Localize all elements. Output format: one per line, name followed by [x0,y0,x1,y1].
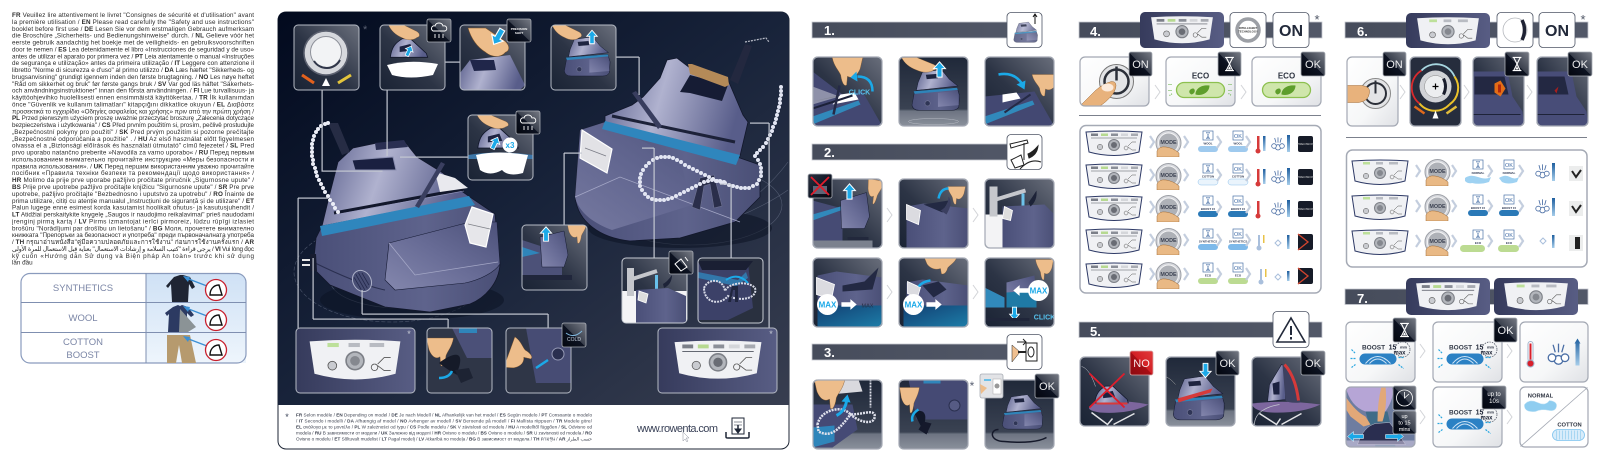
step 7.1 panel: boost warming: 15 [1389,344,1396,352]
badge: OK: OK [1305,358,1322,370]
badge: OK [1301,351,1325,375]
badge: OK: OK [1572,59,1589,71]
text block: multilingual safety notice: PL Przed pierwszym użyciem proszę uważnie przeczytać broszurę „Zalecenia dotyczące [12,115,254,122]
badge: up to 10s: 10s [1489,399,1499,405]
icon: ON button [1539,12,1575,48]
badge: ON [1383,52,1406,76]
step 7.3 panel: temperature and steam up [1520,322,1588,382]
panel: control panel variant B [658,328,777,393]
text block: multilingual safety notice: lần đầu [12,258,33,266]
text block: multilingual safety notice: eerste gebruik aandachtig het boekje met de veiligheids- en gebruiksvoorschriften [12,40,254,46]
section 4 header [1079,22,1322,39]
chevron [1507,410,1512,424]
text block: multilingual safety notice: Palun lugege enne esimest korda kasutamist hoolikalt ohutus- ja kasutusjuhendit / [12,205,254,212]
section 3 header [812,344,1030,360]
step 7.2 panel: boost ready: max [1480,350,1493,356]
table: steam modes (model with five settings) [1080,126,1321,293]
step 2.5 panel: MAX [905,300,923,310]
asterisk: * [363,24,368,36]
step 4.2 panel: ECO blinking: ECO [1192,72,1209,80]
step 7.2 panel: boost ready: BOOST [1449,344,1472,352]
step 7.6 panel: normal or cotton: COTTON [1557,422,1582,428]
row: synthetics [1086,228,1313,255]
text block: multilingual safety notice: προσεκτικά το εγχειρίδιο «Οδηγίες ασφαλείας και χρήσης» πριν από την πρώτη χρήση / [12,107,254,115]
floor rings [294,162,788,322]
row: eco: MODE [1160,272,1177,278]
text block: multilingual safety notice: olvassa el a „Biztonsági előírások és használati útmutató" című fejezetet / SL Pred [12,143,254,150]
step 1.3 panel [984,56,1059,126]
row: eco [1086,262,1313,289]
row: normal [1352,160,1583,186]
badge: no iron on base [808,174,832,198]
row: eco [1352,230,1583,256]
row: cotton: COTTON [1232,174,1244,178]
badge: OK [1301,52,1325,76]
table: fabric settings: COTTON [63,337,103,348]
step 7.5 panel: boost indicator [1433,387,1502,447]
footnote: depending on model: Ovisno o modelu / ET Sõltuvalt mudelist / LT Pagal modelį / LV Atkarībā no modeļa / BG В зависимост от модела / TH ตามรุ่น / AR حسب الطراز [296,436,592,442]
row: boost [1352,194,1583,221]
panel: drain cap [504,328,571,393]
badge: clock [1393,386,1416,410]
badge: precision shot: PRECISION [511,27,527,31]
chevron [1241,85,1246,99]
row: eco: OK [1234,266,1242,272]
badge: steam [427,19,451,42]
chevron [1507,344,1512,358]
step 1.1 panel [812,56,882,126]
text block: multilingual safety notice: / TH กรุณาอ่านหนังสือ"คู่มือความปลอดภัยและการใช้งาน" ก่อนการใช้งานครั้งแรก / AR [12,237,254,246]
row: cotton: COTTON [1202,174,1214,178]
row: normal: MODE [1429,169,1446,175]
step 6.4 panel: light off [1536,56,1588,126]
badge: ON [1129,52,1152,76]
tile: control panel [1140,12,1224,48]
step 2.3 panel [984,178,1054,248]
step 7.6 panel: normal or cotton [1520,387,1588,447]
row: cotton: PRECISION [1297,175,1314,179]
badge: ON: ON [1386,59,1403,71]
connector lines [298,56,770,328]
section 4 header: 4. [1090,24,1101,39]
badge: OK: OK [1220,358,1236,370]
panel: tank removal [522,223,587,290]
icon: ON button: ON [1279,23,1303,40]
step 4.2 panel: ECO blinking [1166,57,1235,106]
icon: intelligent technology dial [1230,12,1266,48]
badge: OK [1035,374,1059,398]
step 6.3 panel: warning light [1472,56,1524,126]
row: wool: OK [1234,134,1242,140]
step 3.3 panel [984,380,1054,450]
step 2.4 panel: MAX [862,304,874,310]
text block: multilingual safety notice: įrenginį pirmą kartą / LV Pirms izmantojat ierīci pirmoreiz, lūdzu rūpīgi izlasiet [12,218,254,225]
step 2.6 panel: MAX [1030,286,1048,296]
panel: triple steam [468,115,533,180]
panel: precision shot [460,25,525,90]
panel: lift iron [551,25,616,90]
badge: OK: OK [1039,381,1056,393]
badge: up to 10s: up to [1487,392,1501,398]
step 5.3 panel: upright on heel [1252,356,1322,426]
divider [1079,114,1321,116]
illustration: steam station left view [302,123,500,312]
row: synthetics: OK [1234,232,1242,238]
panel: cord storage [698,258,763,323]
footnote: depending on model: / IT Secondo i modelli / DA Afhængig af model / NO Avhenger av modell / SV Beroende på modell / FI Mallista riippuen / TR Modele göre/ [296,418,593,424]
badge: triple steam [516,111,540,134]
badge: cold [562,323,586,347]
divider [1346,136,1587,138]
step 6.1 panel: press ON [1346,56,1398,126]
row: eco: OK [1505,233,1513,239]
panel: control panel variant B: * [769,329,773,339]
row: wool: PRECISION [1297,142,1314,146]
icon: cursor [683,432,689,442]
section 1 header [812,22,1030,38]
panel: triple steam: x3 [506,141,515,150]
badge: NO: NO [1133,358,1150,370]
row: boost: BOOST 15 [1231,207,1246,211]
badge: OK: OK [1498,325,1514,337]
step 4.1 panel: press ON [1080,56,1150,106]
text block: multilingual safety notice: BS Prije prve upotrebe pažljivo pročitajte knjižicu "Sigurnosne upute" / SR Pre prve [12,184,254,191]
icon: intelligent technology dial: TECHNOLOGY [1238,30,1258,34]
chevron [1420,344,1425,358]
text block: multilingual safety notice: och användningsinstruktioner" innan den första användningen. / FI Lue turvallisuus- ja [12,88,254,95]
footnote: depending on model: * [285,412,289,422]
row: boost: PRECISION [1297,207,1314,211]
step 7.5 panel: boost indicator: max [1480,416,1493,422]
text block: multilingual safety notice: LT Atidžiai perskaitykite knygelę „Saugos ir naudojimo reikalavimai" prieš naudodami [12,212,254,218]
icon: download document [726,418,749,438]
step 5.2 panel: on base [1166,356,1236,426]
text block: multilingual safety notice: правила использования». / UK Перед першим використанням уважно прочитайте [12,162,254,170]
step 5.1 panel: not flat on board [1080,356,1150,426]
badge: OK [1216,351,1239,375]
icon: ON button: ON [1545,23,1569,40]
step 7.2 panel: boost ready: 15 [1476,344,1483,352]
section 5 header [1079,322,1322,339]
text block: multilingual safety notice: kỹ cuốn «Hướng dẫn Sử dụng và Biện pháp An toàn» trước khi sử dụng [12,251,254,260]
row: boost: MODE [1429,204,1446,210]
text block: multilingual safety notice: „Bezpečnostní pokyny pro použití" / SK Pred prvým použitím si pozorne prečítajte [12,129,254,136]
row: wool [1086,130,1314,157]
badge: cold: COLD [567,337,581,343]
badge: NO [1130,351,1153,375]
tile: control panel five settings [1406,278,1490,315]
step 7.4 panel: ironing movement [1346,386,1416,448]
row: eco: MODE [1429,239,1446,245]
asterisk: * [1580,12,1586,27]
table: fabric settings: WOOL [68,313,98,324]
row: boost: BOOST 15 [1201,207,1216,211]
step 7.5 panel: boost indicator: BOOST [1449,410,1472,416]
icon: temperature dial [1497,12,1533,48]
panel: fill under tap [622,258,687,323]
badge: OK [1568,52,1592,76]
text block: multilingual safety notice: FR Veuillez lire attentivement le livret "Consignes de sécurité et d'utilisation" avant [12,12,254,19]
tile: control panel three settings [1494,278,1578,315]
section 5 header: 5. [1090,324,1101,339]
row: boost: OK [1234,199,1242,205]
footnote: depending on model: modela / RU В зависимости от модели / UK Залежно від моделі / HR Ovisno o modelu / BS Ovisno o modelu / SR U zavisnosti od modela / RO [296,430,592,436]
text block: multilingual safety notice: upotrebe, pažljivo pročitajte "Bezbednosno i uputstvo za upotrebu" / RO Înainte de [12,189,254,198]
step 7.1 panel: boost warming: min [1400,344,1408,350]
row: synthetics: MODE [1160,238,1177,244]
hose: left station [310,121,340,214]
row: boost [1086,196,1314,222]
footnote: depending on model [285,412,593,442]
chevron [1464,85,1469,99]
panel: temperature dial [294,25,359,90]
table: fabric settings [21,273,246,363]
row: cotton: MODE [1160,173,1177,179]
badge: precision shot [507,19,531,42]
asterisk: * [970,379,975,393]
chevron [1527,85,1532,99]
row: eco: ECO [1475,241,1482,245]
badge: up to 15 mins: to 15 [1398,420,1411,426]
row: eco: ECO [1235,274,1242,278]
step 7.1 panel: boost warming: max [1393,350,1406,356]
row: boost: MODE [1160,205,1177,211]
panel: control panel variant A [296,328,415,393]
text block: multilingual safety notice: door te nemen / ES Lea detenidamente el libro «Instrucciones de seguridad y de uso» [12,46,254,53]
step 7.1 panel: boost warming [1346,322,1415,382]
step 2.6 panel: CLICK [1034,314,1055,322]
chevrons row 2a [887,208,978,222]
step 6.2 panel: temperature dial [1410,56,1462,126]
section 7 header [1345,289,1588,306]
illustration: steam station right view [575,38,769,241]
text block: multilingual safety notice: käyttöohjevihko huolellisesti ennen ensimmäistä käyttökertaa. / TR İlk kullanımdan [12,93,254,102]
text block: multilingual safety notice: booklet before first use / DE Lesen Sie vor dem erstmaligen Gebrauch aufmerksam [12,26,254,33]
chevron [1420,410,1425,424]
row: eco: ECO [1506,241,1513,245]
step 7.5 panel: boost indicator: min [1487,410,1495,414]
text block: multilingual safety notice: посібник «Правила техніки безпеки та рекомендації щодо використання» / [12,169,254,177]
icon: intelligent technology dial: INTELLIGENT [1239,26,1257,30]
section 2 header: 2. [824,145,835,160]
hose: right station [638,85,783,202]
panel: control panel variant A: * [407,329,411,339]
row: boost: BOOST 15 [1471,206,1486,210]
text block: multilingual safety notice: la première utilisation / EN Please read carefully the "Safety and use instructions" [12,19,254,26]
badge: hourglass [1393,318,1416,342]
row: wool: WOOL [1204,142,1213,146]
step 7.1 panel: boost warming: BOOST [1362,344,1385,352]
step 7.5 panel: boost indicator: 15 [1476,410,1483,416]
text block: multilingual safety notice: يرجى قراءة "كتيب السلامة و إرشادات الاستعمال" بعناية قبل الاستعمال للمرة الأولى / VI Vui lòng đọc [12,245,254,253]
section 7 header: 7. [1357,291,1368,306]
table: fabric settings: BOOST [66,350,100,361]
panel: steam button [380,24,445,90]
section 6 header [1345,22,1588,39]
text block: multilingual safety notice [12,12,254,266]
website url: www.rowenta.com [636,423,718,435]
row: normal: NORMAL [1503,171,1516,175]
step 4.3 panel: ECO ready [1252,57,1321,106]
step 1.1 panel: CLICK [849,90,870,96]
row: synthetics: SYNTHETICS [1229,240,1247,244]
row: cotton: OK [1234,167,1242,173]
icon: ON button [1273,12,1309,48]
row: eco: ECO [1205,274,1212,278]
badge: up to 15 mins [1393,411,1416,434]
icon: plug in [1007,334,1042,370]
text block: multilingual safety notice: antes de utilizar el aparato por primera vez / PT Leia atentamente o manual «Instruções [12,53,254,60]
row: normal: NORMAL [1472,171,1485,175]
badge: up to 10s [1482,386,1506,409]
step 2.6 panel [984,258,1055,328]
step 7.2 panel: boost ready [1433,322,1502,382]
step 3.1 panel [812,380,882,450]
step 7.2 panel: boost ready: min [1487,344,1495,350]
footnote: depending on model: FR Selon modèle / EN Depending on model / DE Je nach Modell / NL Afhankelijk van het model / ES Según modelo / PT Consoante o modelo [296,412,592,418]
row: normal: OK [1505,163,1513,169]
step 2.5 panel [898,258,968,328]
badge: wall socket [980,374,1003,398]
row: boost: BOOST 15 [1502,206,1517,210]
tile: control panel [1406,13,1490,48]
text block: multilingual safety notice: prima utilizare, citiți cu atenție manualul „Instrucțiuni de siguranță și de utilizare" / ET [12,198,254,205]
step 2.4 panel [812,258,882,328]
section 3 header: 3. [824,345,835,360]
badge: ON: ON [1132,59,1149,71]
badge: precision shot: SHOT [515,31,523,35]
text block: multilingual safety notice: brošūru "Norādījumi par drošību un lietošanu" / BG Моля, прочетете внимателно [12,225,254,232]
badge: hourglass [1505,52,1529,76]
badge: up to 15 mins: up [1401,414,1408,420]
text block: multilingual safety notice: "Råd om sikkerhet og bruk" før første gangs bruk / SV Var god läs häftet "Säkerhets- [12,80,254,88]
table: fabric settings: SYNTHETICS [53,283,113,294]
step 1.2 panel [898,56,968,126]
badge: hourglass [1218,52,1241,76]
text block: multilingual safety notice: prvo uporabo natančno preberite »Navodila za varno uporabo« / RU Перед первым [12,150,254,157]
step 2.2 panel [898,178,968,248]
asterisk: * [1314,12,1320,27]
panel: main product diagram [278,12,789,449]
table: steam modes (model with three settings) [1346,150,1587,267]
text block: multilingual safety notice: „Bezpečnostné odporúčania a použitie" . / HU Az első használat előtt figyelmesen [12,136,254,143]
section 2 header [812,144,1030,160]
icon: lift iron [1007,12,1042,48]
badge: fill water [669,251,693,274]
panel: unwind plug [426,328,492,393]
chevron [1400,85,1405,99]
text block: multilingual safety notice: использованием внимательно прочитайте инструкцию «Меры безопасности и [12,156,254,164]
step 7.6 panel: normal or cotton: NORMAL [1528,394,1554,400]
row: boost: OK [1505,198,1513,204]
text block: multilingual safety notice: de segurança e utilização» antes da primeira utilização / IT Leggere con attenzione il [12,60,254,67]
row: synthetics: SYNTHETICS [1199,240,1217,244]
text block: multilingual safety notice: HR Molimo da prije prve uporabe pažljivo pročitate priručnik „Sigurnosne upute" / [12,177,254,184]
text block: multilingual safety notice: книжката "Препоръки за безопасност и употреба" преди първоначалната употреба [12,231,254,239]
icon: fill tank [1007,134,1042,170]
station shadows [320,208,772,320]
step 2.1 panel [812,178,884,248]
text block: multilingual safety notice: önce "Güvenlik ve kullanım talimatları" kitapçığını dikkatlice okuyun / EL Διαβάστε [12,100,254,108]
badge: up to 15 mins: mins [1399,427,1411,433]
footnote: depending on model: EL ανάλογα με το μοντέλο / PL W zależności od typu / CS Podle modelu / SK V závislosti od modelu / HU A modelltől függően / SL Odvisno od [296,424,592,430]
step 3.2 panel [898,380,968,450]
icon: warning [1273,312,1309,348]
step 2.4 panel: MAX [819,300,837,310]
chevrons row 2b [887,285,978,299]
row: wool: MODE [1160,140,1177,146]
row: cotton [1086,164,1314,190]
section 1 header: 1. [824,23,835,38]
step 4.3 panel: ECO ready: ECO [1278,72,1295,80]
row: wool: WOOL [1234,142,1243,146]
text block: multilingual safety notice: brugsanvisning" grundigt igennem inden den første brugtagning. / NO Les nøye heftet [12,74,254,81]
chevron [1155,85,1160,99]
badge: OK: OK [1305,59,1322,71]
section 6 header: 6. [1357,24,1368,39]
badge: OK [1494,318,1517,342]
text block: multilingual safety notice: bezpieczeństwa i użytkowania" / CS Před prvním použitím si, prosím, pečlivě prostudujte [12,122,254,129]
text block: multilingual safety notice: die Broschüre „Sicherheits- und Bedienungshinweise" durch. / NL Gelieve vóór het [12,33,254,40]
text block: multilingual safety notice: libretto "Norme di sicurezza e d'uso" al primo utilizzo / DA Læs hæftet "Sikkerheds- og [12,67,254,74]
